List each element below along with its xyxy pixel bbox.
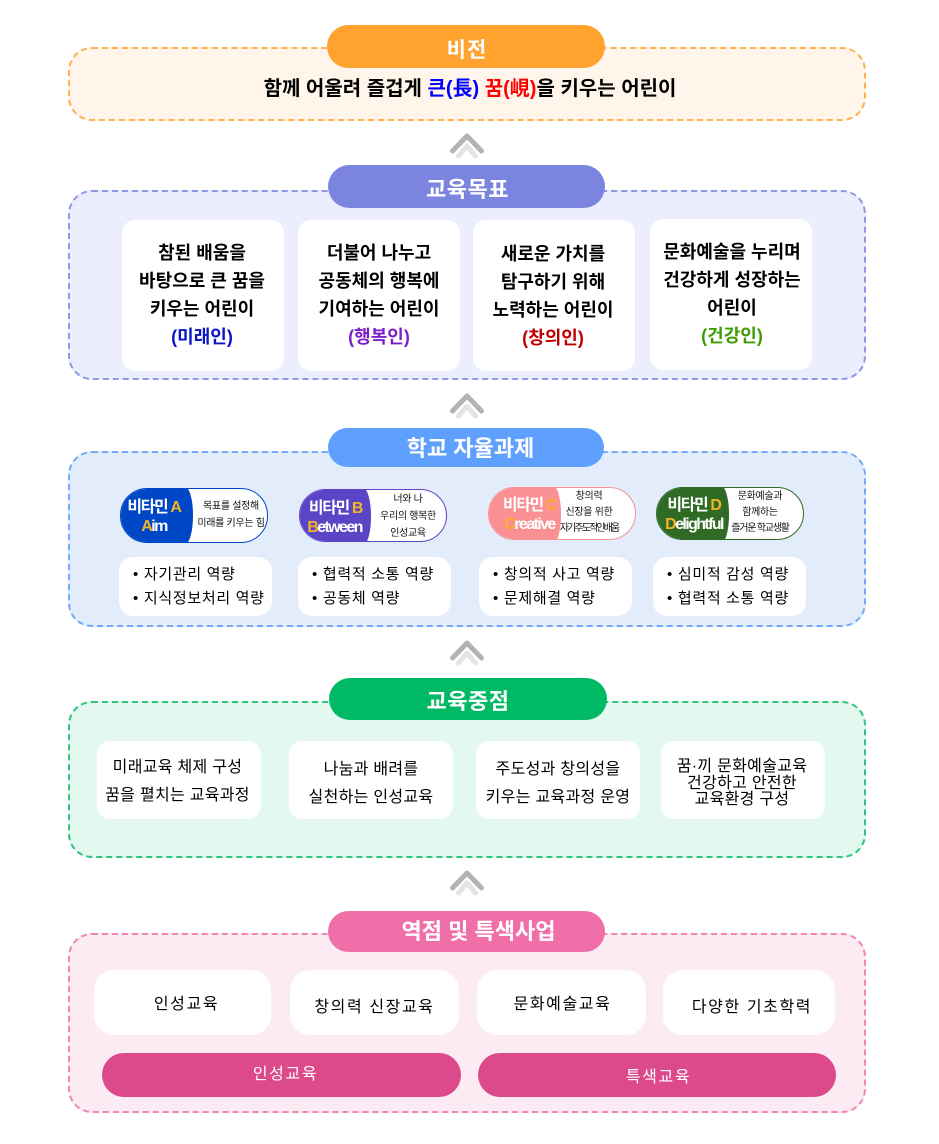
vitamin A competencies: • 지식정보처리 역량 bbox=[133, 590, 265, 607]
vitamin D competencies: • 심미적 감성 역량 bbox=[667, 566, 789, 583]
vitamin D pill: 함께하는 bbox=[742, 507, 778, 518]
vitamin C pill: 창의력 bbox=[576, 491, 602, 502]
focus card 2: 나눔과 배려를 bbox=[324, 761, 418, 778]
focus card 1: 꿈을 펼치는 교육과정 bbox=[105, 787, 250, 804]
heading: education focus: 교육중점 bbox=[427, 689, 509, 714]
bar: character education: 인성교육 bbox=[253, 1066, 318, 1083]
goal card: healthy bbox=[650, 219, 812, 370]
vitamin A pill: 비타민 A bbox=[127, 499, 181, 516]
arrow: up 2 bbox=[450, 394, 484, 418]
arrow: up 4 bbox=[450, 870, 484, 896]
project card 3 bbox=[477, 970, 646, 1035]
project card 4 bbox=[663, 970, 835, 1035]
vitamin B competencies bbox=[298, 557, 451, 616]
vitamin B pill: 너와 나 bbox=[393, 494, 423, 505]
project card 2: 창의력 신장교육 bbox=[314, 999, 435, 1016]
vitamin D pill: 문화예술과 bbox=[738, 491, 782, 502]
project card 4: 다양한 기초학력 bbox=[692, 999, 812, 1016]
focus card 4: 건강하고 안전한 bbox=[687, 774, 797, 792]
vitamin C competencies: • 창의적 사고 역량 bbox=[493, 566, 615, 583]
vitamin D pill: 비타민 D bbox=[667, 497, 721, 514]
goal card: creative: 새로운 가치를 bbox=[501, 244, 605, 264]
vitamin C pill: 신장을 위한 bbox=[566, 507, 612, 518]
heading: school autonomous tasks: 학교 자율과제 bbox=[407, 436, 534, 461]
goal card: future bbox=[122, 220, 284, 371]
focus card 3: 키우는 교육과정 운영 bbox=[486, 789, 630, 806]
heading: vision: 비전 bbox=[447, 39, 487, 62]
goal card: creative bbox=[473, 220, 635, 371]
vitamin C pill bbox=[488, 487, 636, 540]
vitamin B competencies: • 협력적 소통 역량 bbox=[312, 566, 434, 583]
goal card: future: 키우는 어린이 bbox=[150, 299, 254, 319]
goal card: creative: (창의인) bbox=[522, 328, 584, 348]
focus card 4: 교육환경 구성 bbox=[695, 791, 789, 808]
project card 3: 문화예술교육 bbox=[514, 996, 611, 1013]
goal card: future: (미래인) bbox=[171, 327, 233, 347]
vitamin D pill: Delightful bbox=[665, 516, 723, 532]
heading: education goals: 교육목표 bbox=[426, 177, 509, 202]
vitamin C pill: 비타민 C bbox=[503, 497, 556, 514]
panel: education goals bbox=[68, 165, 866, 380]
focus card 3: 주도성과 창의성을 bbox=[496, 761, 620, 778]
project card 1: 인성교육 bbox=[154, 996, 219, 1013]
vitamin B pill: 우리의 행복한 bbox=[380, 511, 436, 522]
bar: character education bbox=[102, 1053, 461, 1097]
vitamin B pill: 인성교육 bbox=[390, 528, 426, 539]
vitamin A competencies: • 자기관리 역량 bbox=[133, 566, 236, 583]
arrow: up 1 bbox=[450, 134, 484, 158]
focus box bbox=[68, 701, 866, 858]
focus card 4: 꿈·끼 문화예술교육 bbox=[677, 758, 807, 775]
vitamin D competencies: • 협력적 소통 역량 bbox=[667, 590, 789, 607]
goal card: happiness: 기여하는 어린이 bbox=[319, 299, 439, 319]
goal card: creative: 탐구하기 위해 bbox=[501, 272, 605, 292]
vitamin A pill: 미래를 키우는 힘 bbox=[197, 518, 265, 529]
panel: vision bbox=[68, 25, 866, 121]
bar: special education: 특색교육 bbox=[626, 1069, 691, 1086]
bar: special education bbox=[478, 1053, 836, 1097]
vitamin A pill: 목표를 설정해 bbox=[203, 501, 259, 512]
heading: education goals bbox=[328, 165, 605, 208]
goal card: healthy: 문화예술을 누리며 bbox=[663, 242, 801, 262]
vitamin D pill bbox=[656, 487, 804, 540]
heading: vision bbox=[327, 25, 605, 68]
vitamin D competencies bbox=[653, 557, 806, 616]
projects box bbox=[68, 933, 866, 1113]
heading: education focus bbox=[329, 678, 607, 720]
vitamin C pill: 자기주도적인배움 bbox=[560, 523, 618, 534]
vitamin A pill: Aim bbox=[141, 518, 167, 534]
focus card 2: 실천하는 인성교육 bbox=[309, 789, 433, 806]
panel: education focus bbox=[68, 678, 866, 858]
goal card: healthy: 건강하게 성장하는 bbox=[663, 270, 801, 290]
project card 1 bbox=[94, 970, 271, 1035]
vision statement: 함께 어울려 즐겁게 큰(長) 꿈(峴)을 키우는 어린이 bbox=[264, 78, 676, 100]
heading: key projects: 역점 및 특색사업 bbox=[402, 919, 555, 944]
vitamin D pill: 즐거운 학교생활 bbox=[731, 523, 789, 534]
focus card 4 bbox=[661, 741, 825, 819]
focus card 1: 미래교육 체제 구성 bbox=[113, 759, 242, 776]
vitamin A pill bbox=[120, 488, 268, 543]
panel: key projects bbox=[68, 911, 866, 1113]
vitamin C competencies: • 문제해결 역량 bbox=[493, 590, 596, 607]
goal card: happiness: 공동체의 행복에 bbox=[319, 271, 439, 291]
goal card: happiness: (행복인) bbox=[348, 327, 410, 347]
focus card 3 bbox=[476, 741, 640, 819]
vitamin B pill bbox=[299, 489, 447, 542]
goals box bbox=[68, 190, 866, 380]
tasks box bbox=[68, 451, 866, 627]
goal card: future: 참된 배움을 bbox=[158, 243, 246, 263]
vitamin B competencies: • 공동체 역량 bbox=[312, 590, 400, 607]
vitamin B pill: Between bbox=[307, 518, 362, 536]
goal card: healthy: (건강인) bbox=[701, 326, 763, 346]
vitamin A competencies bbox=[119, 557, 272, 616]
arrow: up 3 bbox=[450, 640, 484, 666]
focus card 1 bbox=[97, 741, 261, 819]
goal card: healthy: 어린이 bbox=[707, 298, 757, 318]
project card 2 bbox=[290, 970, 459, 1035]
goal card: happiness bbox=[298, 220, 460, 371]
heading: key projects bbox=[328, 911, 605, 952]
goal card: creative: 노력하는 어린이 bbox=[493, 300, 613, 320]
vision box bbox=[68, 47, 866, 121]
heading: school autonomous tasks bbox=[328, 428, 604, 467]
vitamin C competencies bbox=[479, 557, 632, 616]
focus card 2 bbox=[289, 741, 453, 819]
goal card: happiness: 더불어 나누고 bbox=[327, 243, 431, 263]
vitamin C pill: Creative bbox=[504, 516, 555, 532]
vitamin B pill: 비타민 B bbox=[309, 500, 362, 517]
goal card: future: 바탕으로 큰 꿈을 bbox=[139, 271, 265, 291]
panel: school autonomous tasks bbox=[68, 428, 866, 627]
